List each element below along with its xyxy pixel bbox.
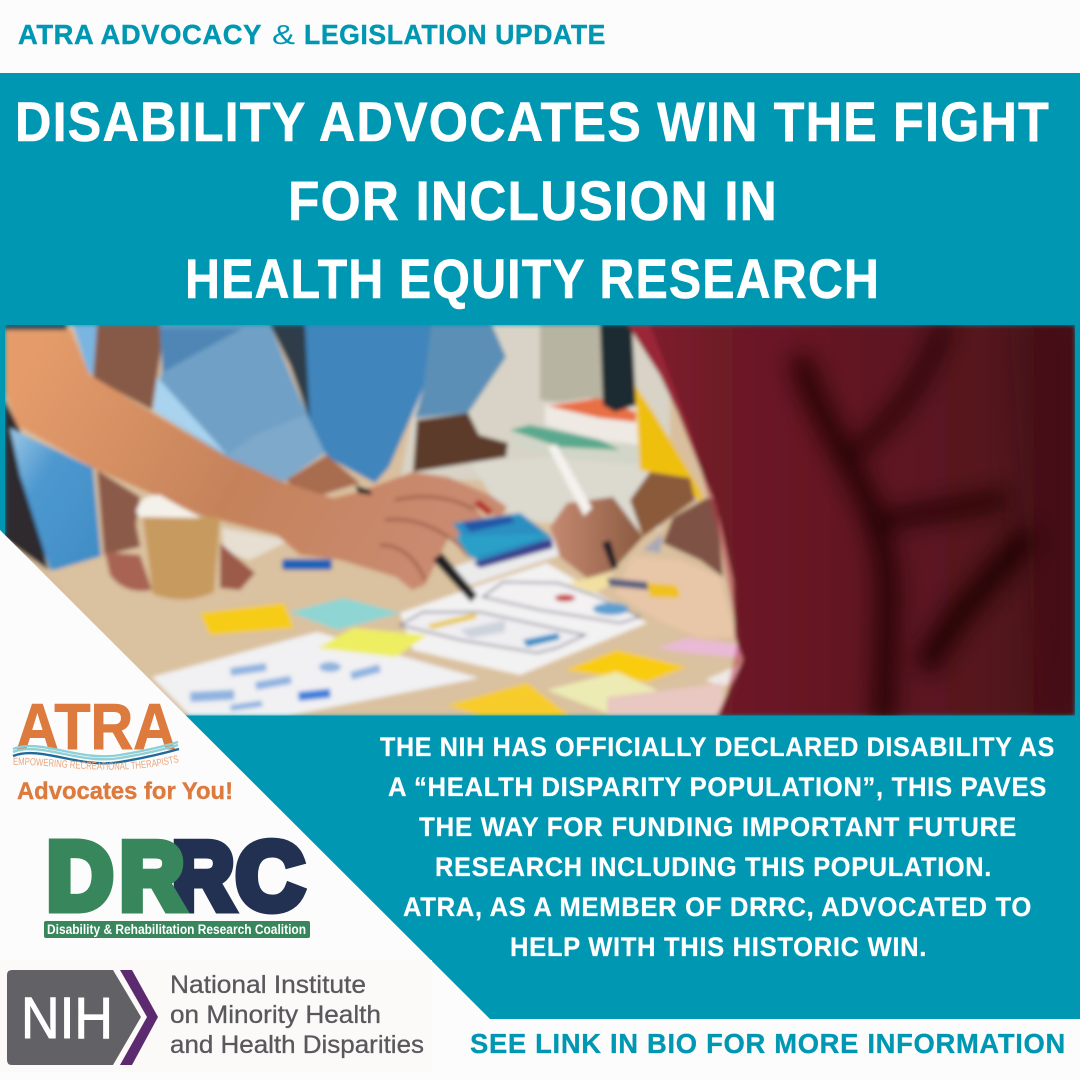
center shirt (157, 325, 310, 475)
white diagonal corner panel (0, 530, 1080, 1080)
footer link note: SEE LINK IN BIO FOR MORE INFORMATION (470, 1028, 1066, 1059)
body text: RESEARCH INCLUDING THIS POPULATION. (435, 852, 992, 882)
title: FOR INCLUSION IN (288, 169, 778, 232)
blue wireframe marks (190, 662, 381, 711)
logo: DRRC (44, 823, 310, 938)
wall and desk background (400, 325, 670, 490)
main arm and hand (5, 329, 507, 590)
table (56, 521, 652, 664)
wrist behind hand (286, 455, 360, 500)
logo: DRRC: R (172, 823, 234, 930)
right hands (643, 533, 663, 553)
logo: ATRA (12, 690, 233, 805)
black holder (600, 325, 636, 412)
white pen (548, 444, 592, 516)
tablet (453, 513, 552, 567)
body text: HELP WITH THIS HISTORIC WIN. (510, 932, 927, 962)
writing hand (550, 497, 643, 578)
blue pen (282, 559, 332, 570)
wireframes (400, 612, 585, 653)
books (545, 398, 640, 445)
header: ATRA advocacy and legislation update (18, 19, 606, 50)
logo: NIH National Institute on Minority Health and Health Disparities: on Minority Health (170, 1001, 381, 1029)
sticky notes (200, 603, 294, 635)
logo: DRRC: R (120, 823, 184, 930)
logo: DRRC: D (47, 823, 113, 930)
writing hand arm (630, 472, 695, 537)
papers (152, 632, 479, 716)
body text (380, 732, 1055, 962)
logo: NIH National Institute on Minority Health and Health Disparities: NIH (21, 986, 113, 1051)
logo: ATRA: ATRA (16, 690, 176, 763)
title (15, 90, 1050, 310)
header: ATRA advocacy and legislation update: & (272, 19, 295, 50)
black marker (433, 553, 477, 602)
maroon folds (802, 330, 1025, 716)
logo: NIH National Institute on Minority Health and Health Disparities: and Health Disparities (170, 1031, 424, 1059)
logo: DRRC: Disability & Rehabilitation Research Coalition (47, 922, 306, 937)
pen held in hand (355, 485, 372, 495)
header: ATRA advocacy and legislation update: ATRA ADVOCACY (18, 19, 262, 50)
body text: THE WAY FOR FUNDING IMPORTANT FUTURE (419, 812, 1017, 842)
logo: NIH National Institute on Minority Health and Health Disparities (0, 960, 432, 1072)
foot (413, 413, 508, 472)
brown arm behind (93, 325, 165, 410)
title: HEALTH EQUITY RESEARCH (185, 247, 880, 310)
logo: DRRC: C (236, 823, 304, 930)
dark clothing at left (5, 400, 48, 570)
coffee cup (143, 517, 220, 600)
logo: ATRA: Advocates for You! (17, 778, 233, 805)
logo: NIH National Institute on Minority Health and Health Disparities: National Institute (170, 971, 366, 999)
hands behind cup (105, 552, 152, 591)
left jeans (10, 428, 102, 570)
body text: A “HEALTH DISPARITY POPULATION”, THIS PAVES (388, 772, 1047, 802)
jeans (301, 325, 436, 485)
header: ATRA advocacy and legislation update: LEGISLATION UPDATE (304, 19, 606, 50)
logo: ATRA: EMPOWERING RECREATIONAL THERAPISTS (14, 756, 178, 770)
light denim sliver (73, 325, 97, 375)
paper under tablet (450, 536, 560, 585)
maroon garment (628, 325, 1075, 716)
photo: team working around a table with sticky notes and wireframes (5, 325, 1075, 716)
body text: ATRA, AS A MEMBER OF DRRC, ADVOCATED TO (403, 892, 1032, 922)
yellow shirt (635, 385, 705, 505)
